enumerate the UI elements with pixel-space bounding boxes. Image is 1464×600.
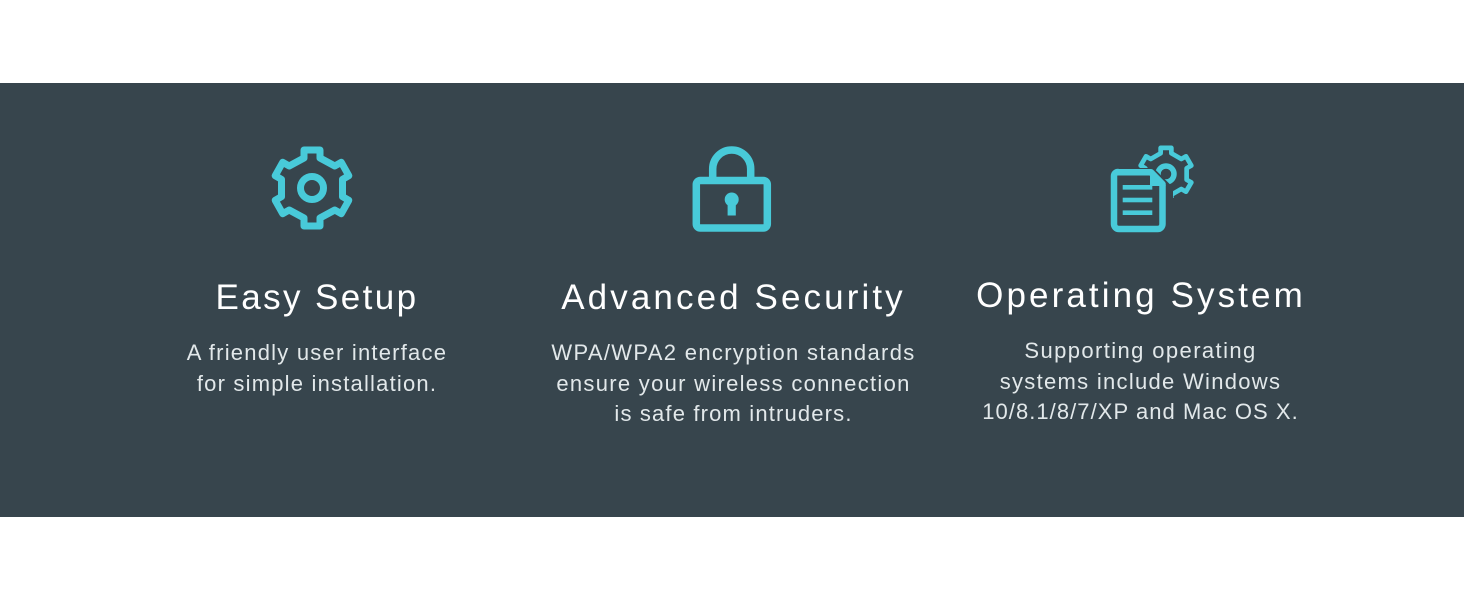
- text: Easy Setup description: A friendly user interface: [187, 340, 447, 365]
- text: Operating System description: systems include Windows: [1000, 368, 1281, 394]
- text: Advanced Security description: [551, 340, 916, 426]
- text: Easy Setup description: for simple installation.: [197, 370, 437, 396]
- text: Operating System description: 10/8.1/8/7/XP and Mac OS X.: [982, 399, 1299, 424]
- text: Operating System description: [982, 338, 1299, 424]
- text: Advanced Security description: ensure your wireless connection: [556, 370, 911, 396]
- text: Easy Setup description: [186, 340, 447, 396]
- heading: Operating System: Operating System: [976, 276, 1306, 315]
- heading: Advanced Security: Advanced Security: [561, 278, 906, 317]
- text: Operating System description: Supporting operating: [1024, 338, 1257, 363]
- heading: Easy Setup: Easy Setup: [216, 278, 418, 317]
- text: Advanced Security description: is safe from intruders.: [614, 401, 853, 426]
- text: Advanced Security description: WPA/WPA2 encryption standards: [551, 340, 916, 365]
- dark band panel: [0, 83, 1464, 517]
